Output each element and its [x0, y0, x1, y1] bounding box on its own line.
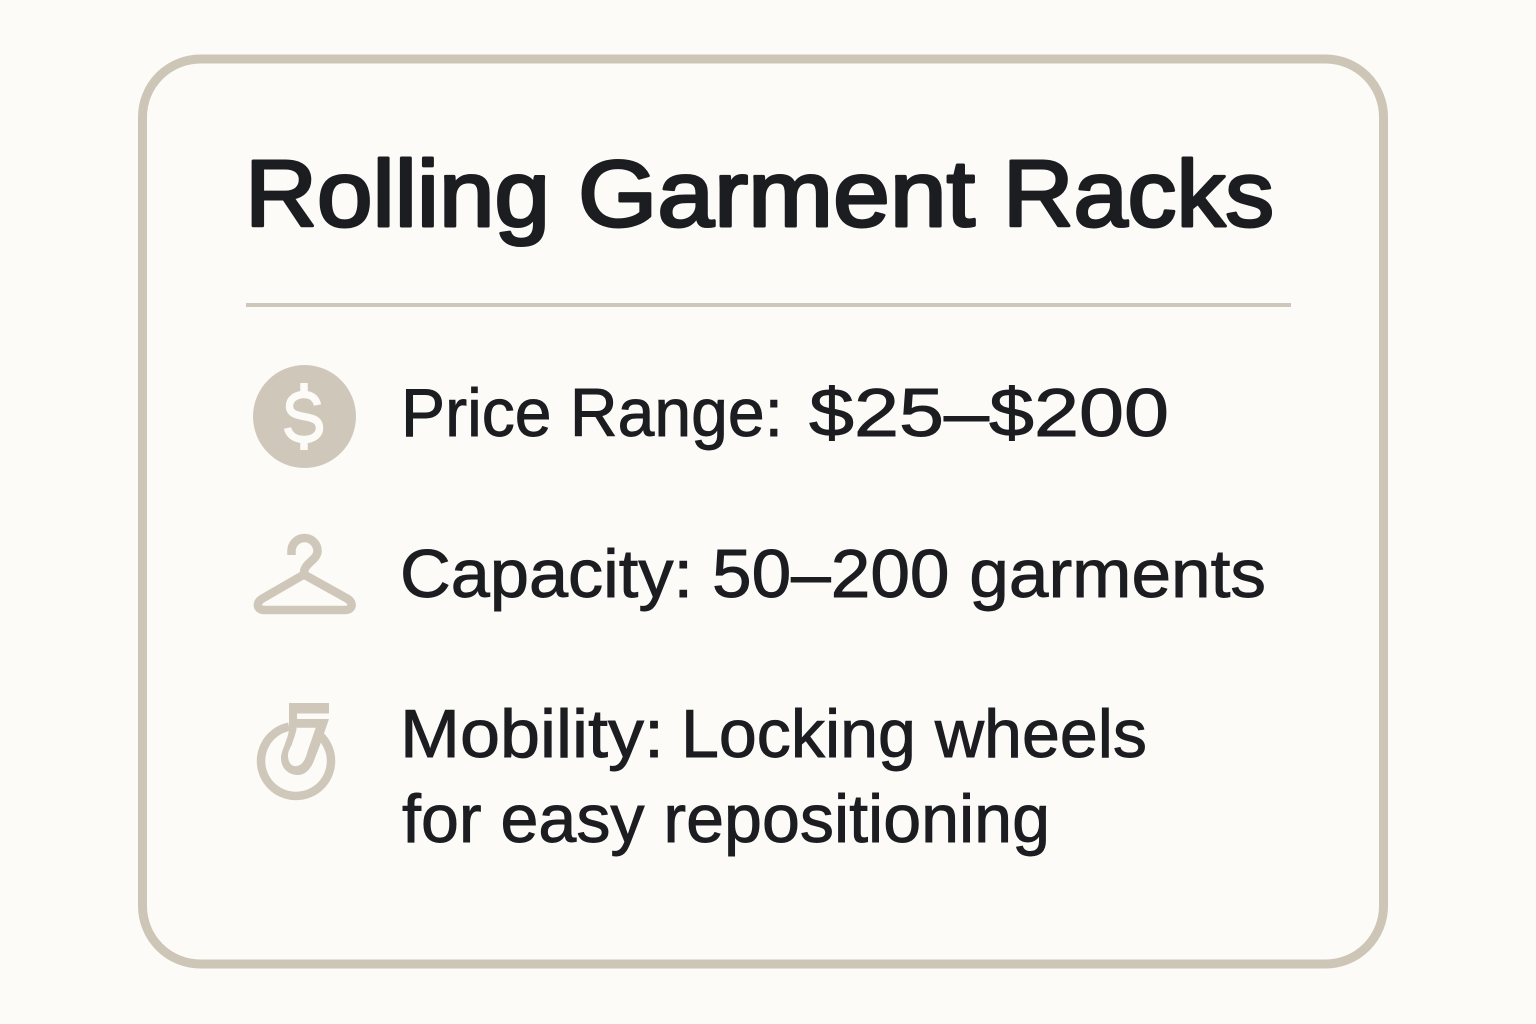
panel: rolling garment racks card: [142, 59, 1384, 964]
title: Garment: [578, 141, 975, 246]
title: Racks: [1003, 141, 1274, 246]
capacity text: [400, 536, 1266, 612]
icon: dollar coin: [253, 365, 356, 468]
capacity text: Capacity:: [400, 536, 693, 612]
icon: locking caster wheel: [261, 703, 331, 796]
price range text: [401, 375, 1169, 451]
price range text: $25–$200: [809, 375, 1169, 451]
price range text: Price Range:: [401, 375, 783, 451]
mobility text: [400, 696, 1147, 857]
mobility text: for easy repositioning: [402, 781, 1050, 857]
mobility text: Mobility:: [400, 696, 664, 772]
mobility text: Locking wheels: [681, 696, 1147, 772]
title: Rolling: [245, 141, 550, 246]
icon: hanger: [258, 538, 352, 610]
title: [245, 141, 1274, 246]
capacity text: 50–200 garments: [712, 536, 1266, 612]
